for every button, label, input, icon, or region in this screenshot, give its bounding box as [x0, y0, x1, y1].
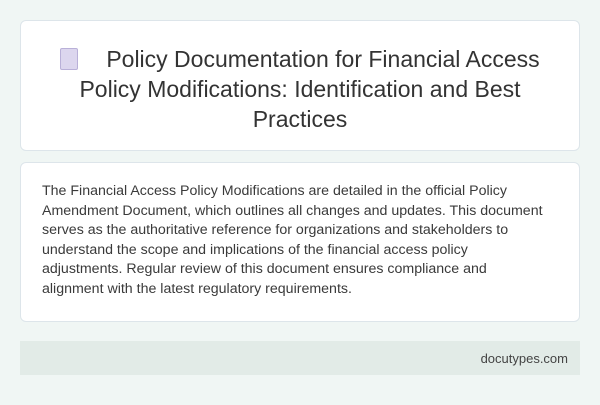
footer text: docutypes.com [481, 351, 568, 366]
footer [20, 341, 580, 375]
text panel [20, 162, 580, 322]
title card [20, 20, 580, 151]
body text: The Financial Access Policy Modifications are detailed in the official Policy Amendment Document, which outlines all changes and updates. This document serves as the authoritative reference for organizations and stakeholders to understand the scope and implications of the financial access policy adjustments. Regular review of this document ensures compliance and alignment with the latest regulatory requirements. [42, 183, 543, 296]
title: Policy Documentation for Financial Access Policy Modifications: Identification and Best Practices [79, 46, 540, 132]
icon: document [60, 48, 78, 70]
